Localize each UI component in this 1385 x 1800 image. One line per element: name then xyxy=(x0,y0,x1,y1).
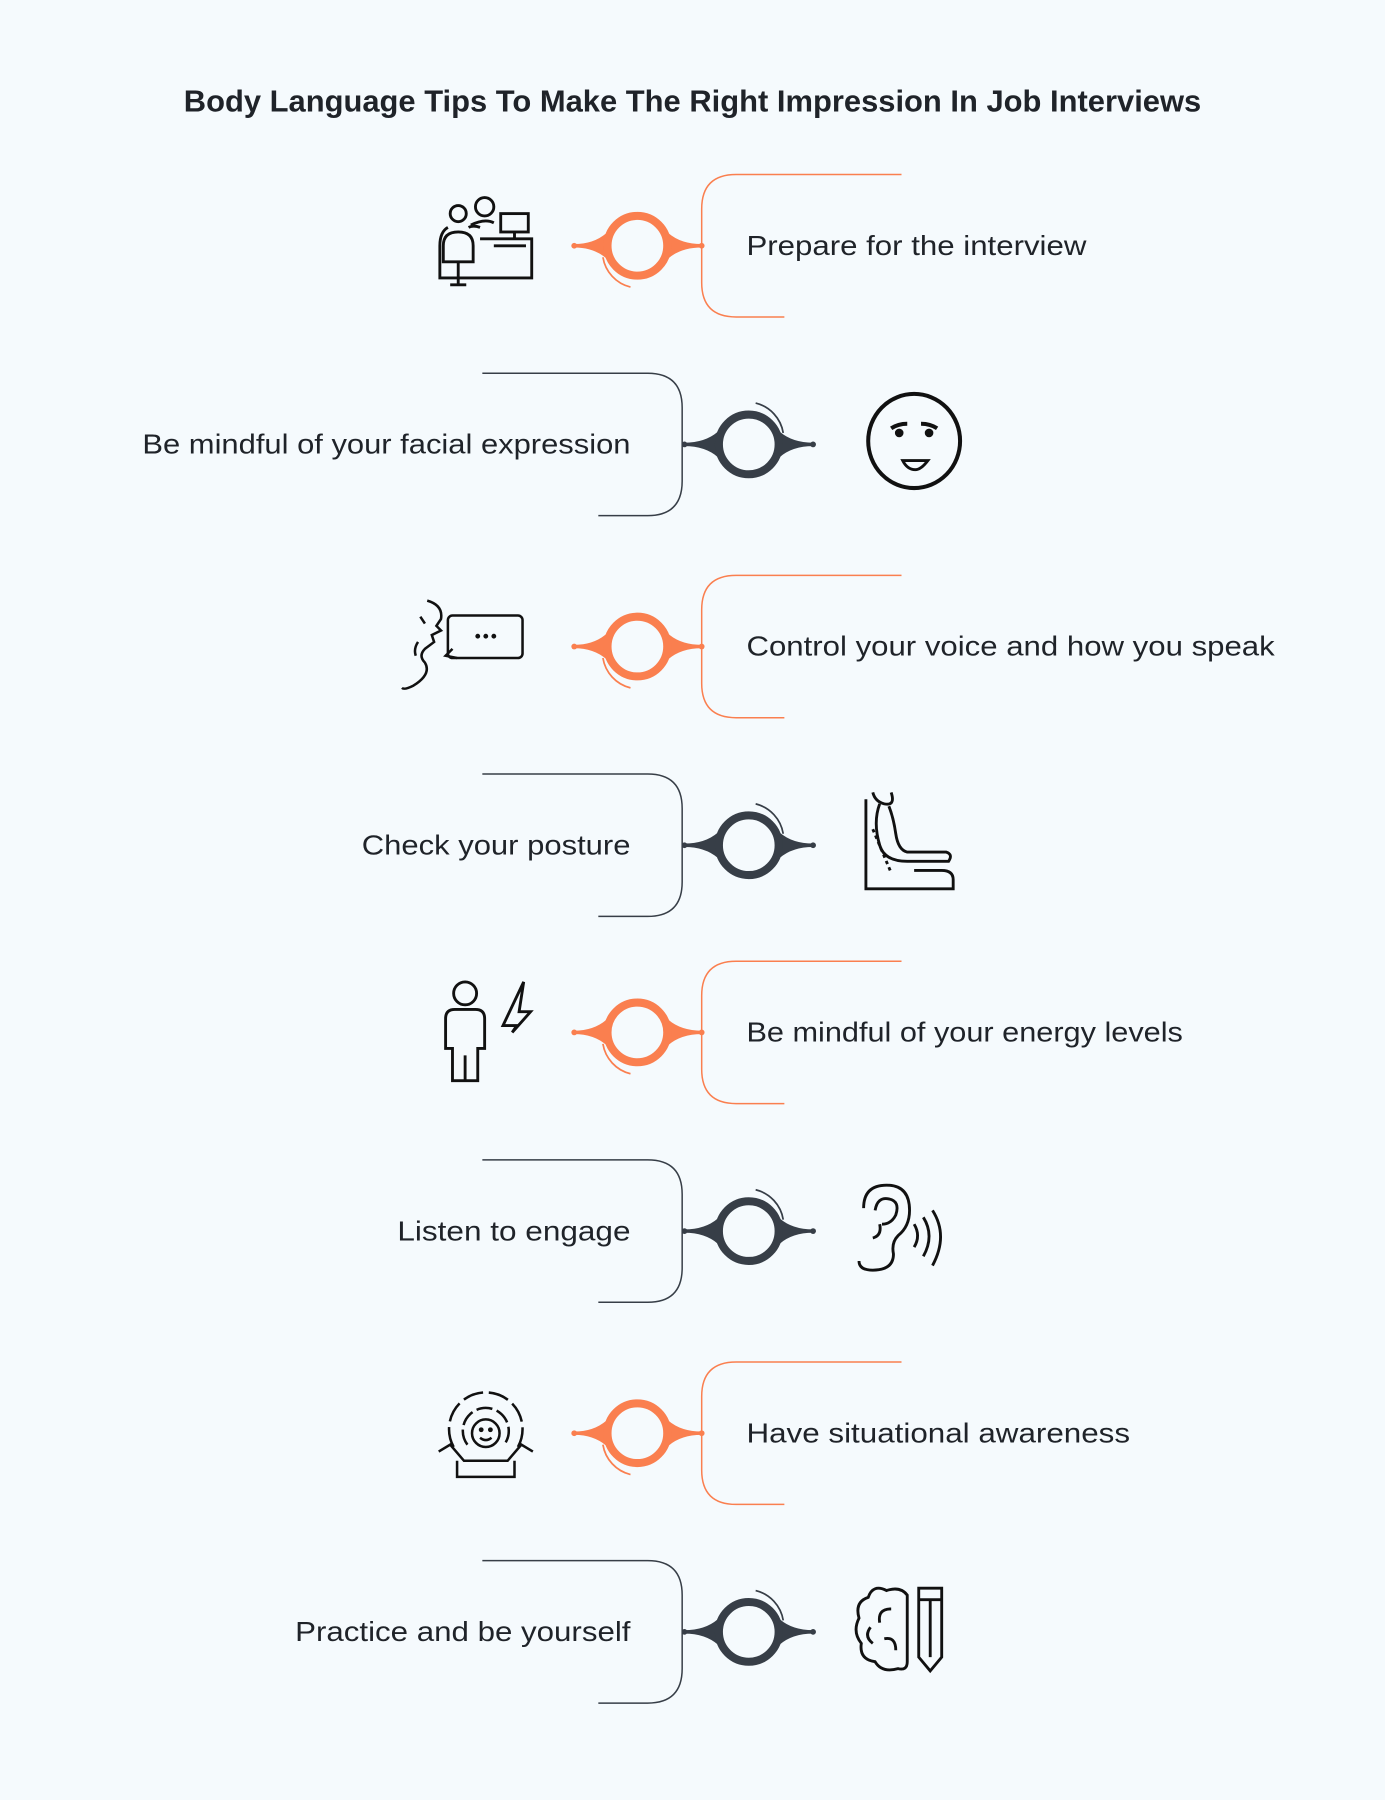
row 3: voice xyxy=(402,575,1275,718)
row 8: practice xyxy=(295,1561,942,1703)
row 2: facial expression: Be mindful of your facial expression xyxy=(142,429,630,460)
row 6: listen: Listen to engage xyxy=(397,1215,630,1246)
row 7: situational: Have situational awareness xyxy=(746,1417,1130,1448)
icon: posture chair xyxy=(866,792,953,889)
row 8: practice: Practice and be yourself xyxy=(295,1616,631,1647)
row 1: prepare xyxy=(440,175,1087,317)
icon: brain pencil xyxy=(856,1588,942,1671)
row 5: energy: Be mindful of your energy levels xyxy=(746,1017,1183,1048)
row 4: posture: Check your posture xyxy=(362,829,630,860)
row 4: posture xyxy=(362,774,953,916)
row 7: situational xyxy=(439,1362,1130,1504)
icon: person lightning xyxy=(446,982,531,1081)
title: Body Language Tips To Make The Right Impression In Job Interviews xyxy=(184,83,1201,118)
row 2: facial expression xyxy=(142,373,960,516)
icon: desk xyxy=(440,198,532,285)
icon: ear xyxy=(859,1185,941,1270)
row 3: voice: Control your voice and how you speak xyxy=(746,631,1275,662)
row 5: energy xyxy=(446,961,1183,1104)
row 6: listen xyxy=(397,1160,941,1302)
icon: awareness xyxy=(439,1392,533,1477)
icon: speaking xyxy=(402,601,523,689)
icon: face xyxy=(868,394,960,488)
row 1: prepare: Prepare for the interview xyxy=(746,230,1087,261)
